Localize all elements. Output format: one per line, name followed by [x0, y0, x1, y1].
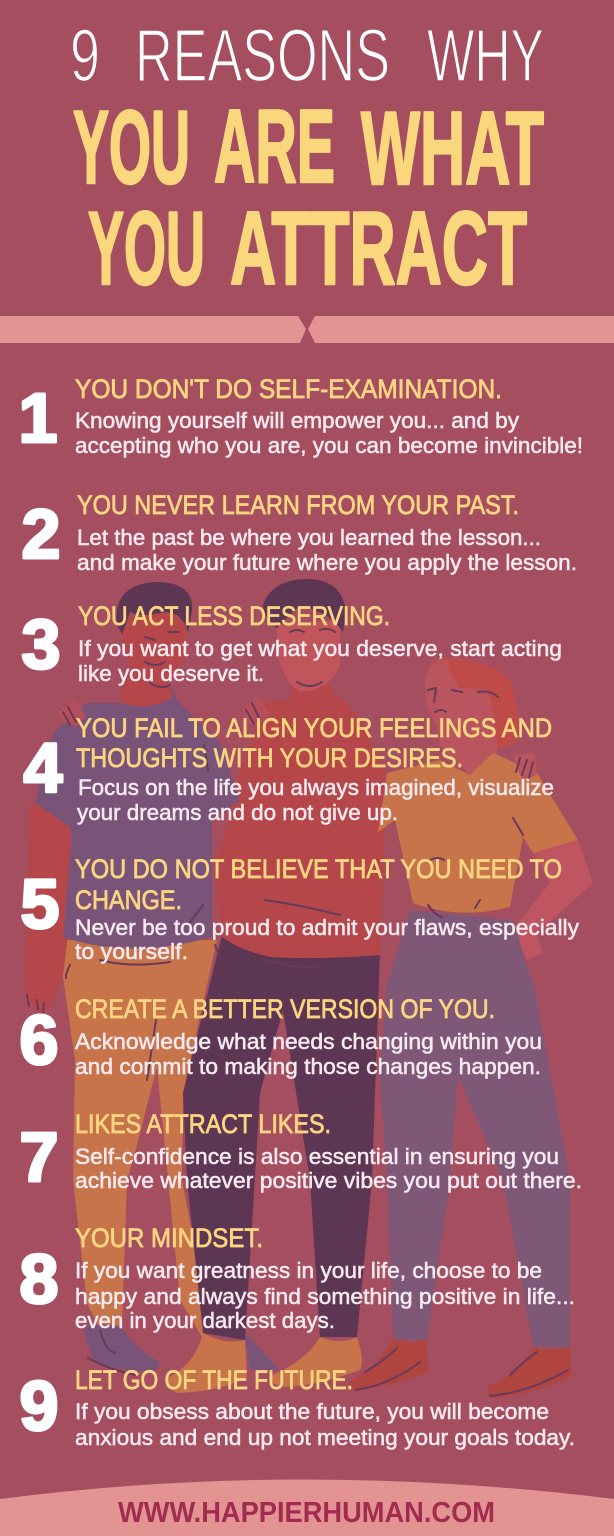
heading 9: LET GO OF THE FUTURE. [75, 1365, 353, 1395]
figure: woman [348, 657, 593, 1398]
heading 2: YOU NEVER LEARN FROM YOUR PAST. [77, 490, 519, 520]
body 8: even in your darkest days. [75, 1308, 335, 1333]
body 1: accepting who you are, you can become invincible! [75, 433, 583, 458]
item 9 [20, 1365, 575, 1450]
item 3 [22, 601, 562, 686]
body 9: If you obsess about the future, you will become [75, 1399, 549, 1424]
number 4: 4 [24, 729, 63, 807]
body 8: happy and always find something positive in life... [75, 1284, 575, 1309]
title line: You Attract [88, 191, 527, 307]
body 1: Knowing yourself will empower you... and by [75, 408, 520, 433]
number 5: 5 [21, 865, 59, 943]
item 7 [20, 1109, 582, 1196]
figure: left man torso [35, 582, 340, 1080]
title line: You Are What: YOU [73, 90, 190, 206]
body 3: like you deserve it. [78, 661, 264, 686]
body 8: If you want greatness in your life, choose to be [75, 1258, 542, 1283]
number 9: 9 [20, 1367, 58, 1445]
item 1 [19, 374, 583, 458]
heading 4 [76, 713, 552, 773]
heading 7: LIKES ATTRACT LIKES. [75, 1109, 331, 1139]
heading 8: YOUR MINDSET. [75, 1223, 263, 1253]
number 1: 1 [19, 379, 57, 457]
body 9: anxious and end up not meeting your goals today. [75, 1425, 575, 1450]
heading 5: CHANGE. [75, 885, 182, 915]
title line: You Attract: YOU [88, 191, 205, 307]
footer url: WWW.HAPPIERHUMAN.COM [118, 1497, 495, 1529]
number 7: 7 [20, 1118, 58, 1196]
body 7: Self-confidence is also essential in ensuring you [75, 1144, 559, 1169]
heading 3: YOU ACT LESS DESERVING. [78, 601, 390, 631]
figure: left man legs [25, 803, 217, 1375]
number 6: 6 [20, 1001, 58, 1079]
illustration: three friends [25, 579, 593, 1398]
item 8 [20, 1223, 575, 1333]
title line: 9 Reasons Why: REASONS [135, 14, 390, 97]
body 3: If you want to get what you deserve, start acting [78, 636, 562, 661]
heading 1: YOU DON'T DO SELF-EXAMINATION. [75, 374, 502, 404]
body 3 [78, 636, 562, 686]
body 6: and commit to making those changes happen. [75, 1054, 541, 1079]
title line: You Are What [73, 89, 544, 207]
heading 5 [75, 854, 562, 915]
body 7: achieve whatever positive vibes you put out there. [75, 1168, 582, 1193]
title line: You Are What: ARE [214, 89, 335, 205]
body 7 [75, 1144, 582, 1193]
item 6 [20, 994, 542, 1079]
title [70, 14, 544, 307]
body 6 [75, 1029, 542, 1079]
footer [0, 1480, 614, 1536]
title line: 9 Reasons Why: WHY [427, 14, 544, 97]
item 5 [21, 854, 580, 964]
title line: 9 Reasons Why: 9 [70, 14, 100, 97]
footer banner [0, 1480, 614, 1536]
item 2 [22, 490, 577, 575]
body 4: Focus on the life you always imagined, visualize [78, 775, 554, 800]
number 2: 2 [22, 495, 60, 573]
body 5: to yourself. [75, 939, 188, 964]
item 4 [24, 713, 554, 825]
body 9 [75, 1399, 575, 1450]
number 3: 3 [22, 605, 60, 683]
body 8 [75, 1258, 575, 1333]
heading 4: THOUGHTS WITH YOUR DESIRES. [76, 743, 463, 773]
figure: center man [167, 579, 387, 1393]
heading 4: YOU FAIL TO ALIGN YOUR FEELINGS AND [76, 713, 552, 743]
body 2 [77, 525, 577, 575]
body 2: Let the past be where you learned the lesson... [77, 525, 541, 550]
body 5 [75, 915, 580, 964]
body 2: and make your future where you apply the lesson. [77, 550, 577, 575]
divider band [0, 316, 614, 343]
body 1 [75, 408, 583, 458]
number 8: 8 [20, 1240, 58, 1318]
heading 6: CREATE A BETTER VERSION OF YOU. [75, 994, 495, 1024]
body 4 [77, 775, 554, 825]
body 4: your dreams and do not give up. [77, 800, 398, 825]
body 6: Acknowledge what needs changing within you [75, 1029, 542, 1054]
body 5: Never be too proud to admit your flaws, especially [75, 915, 580, 940]
